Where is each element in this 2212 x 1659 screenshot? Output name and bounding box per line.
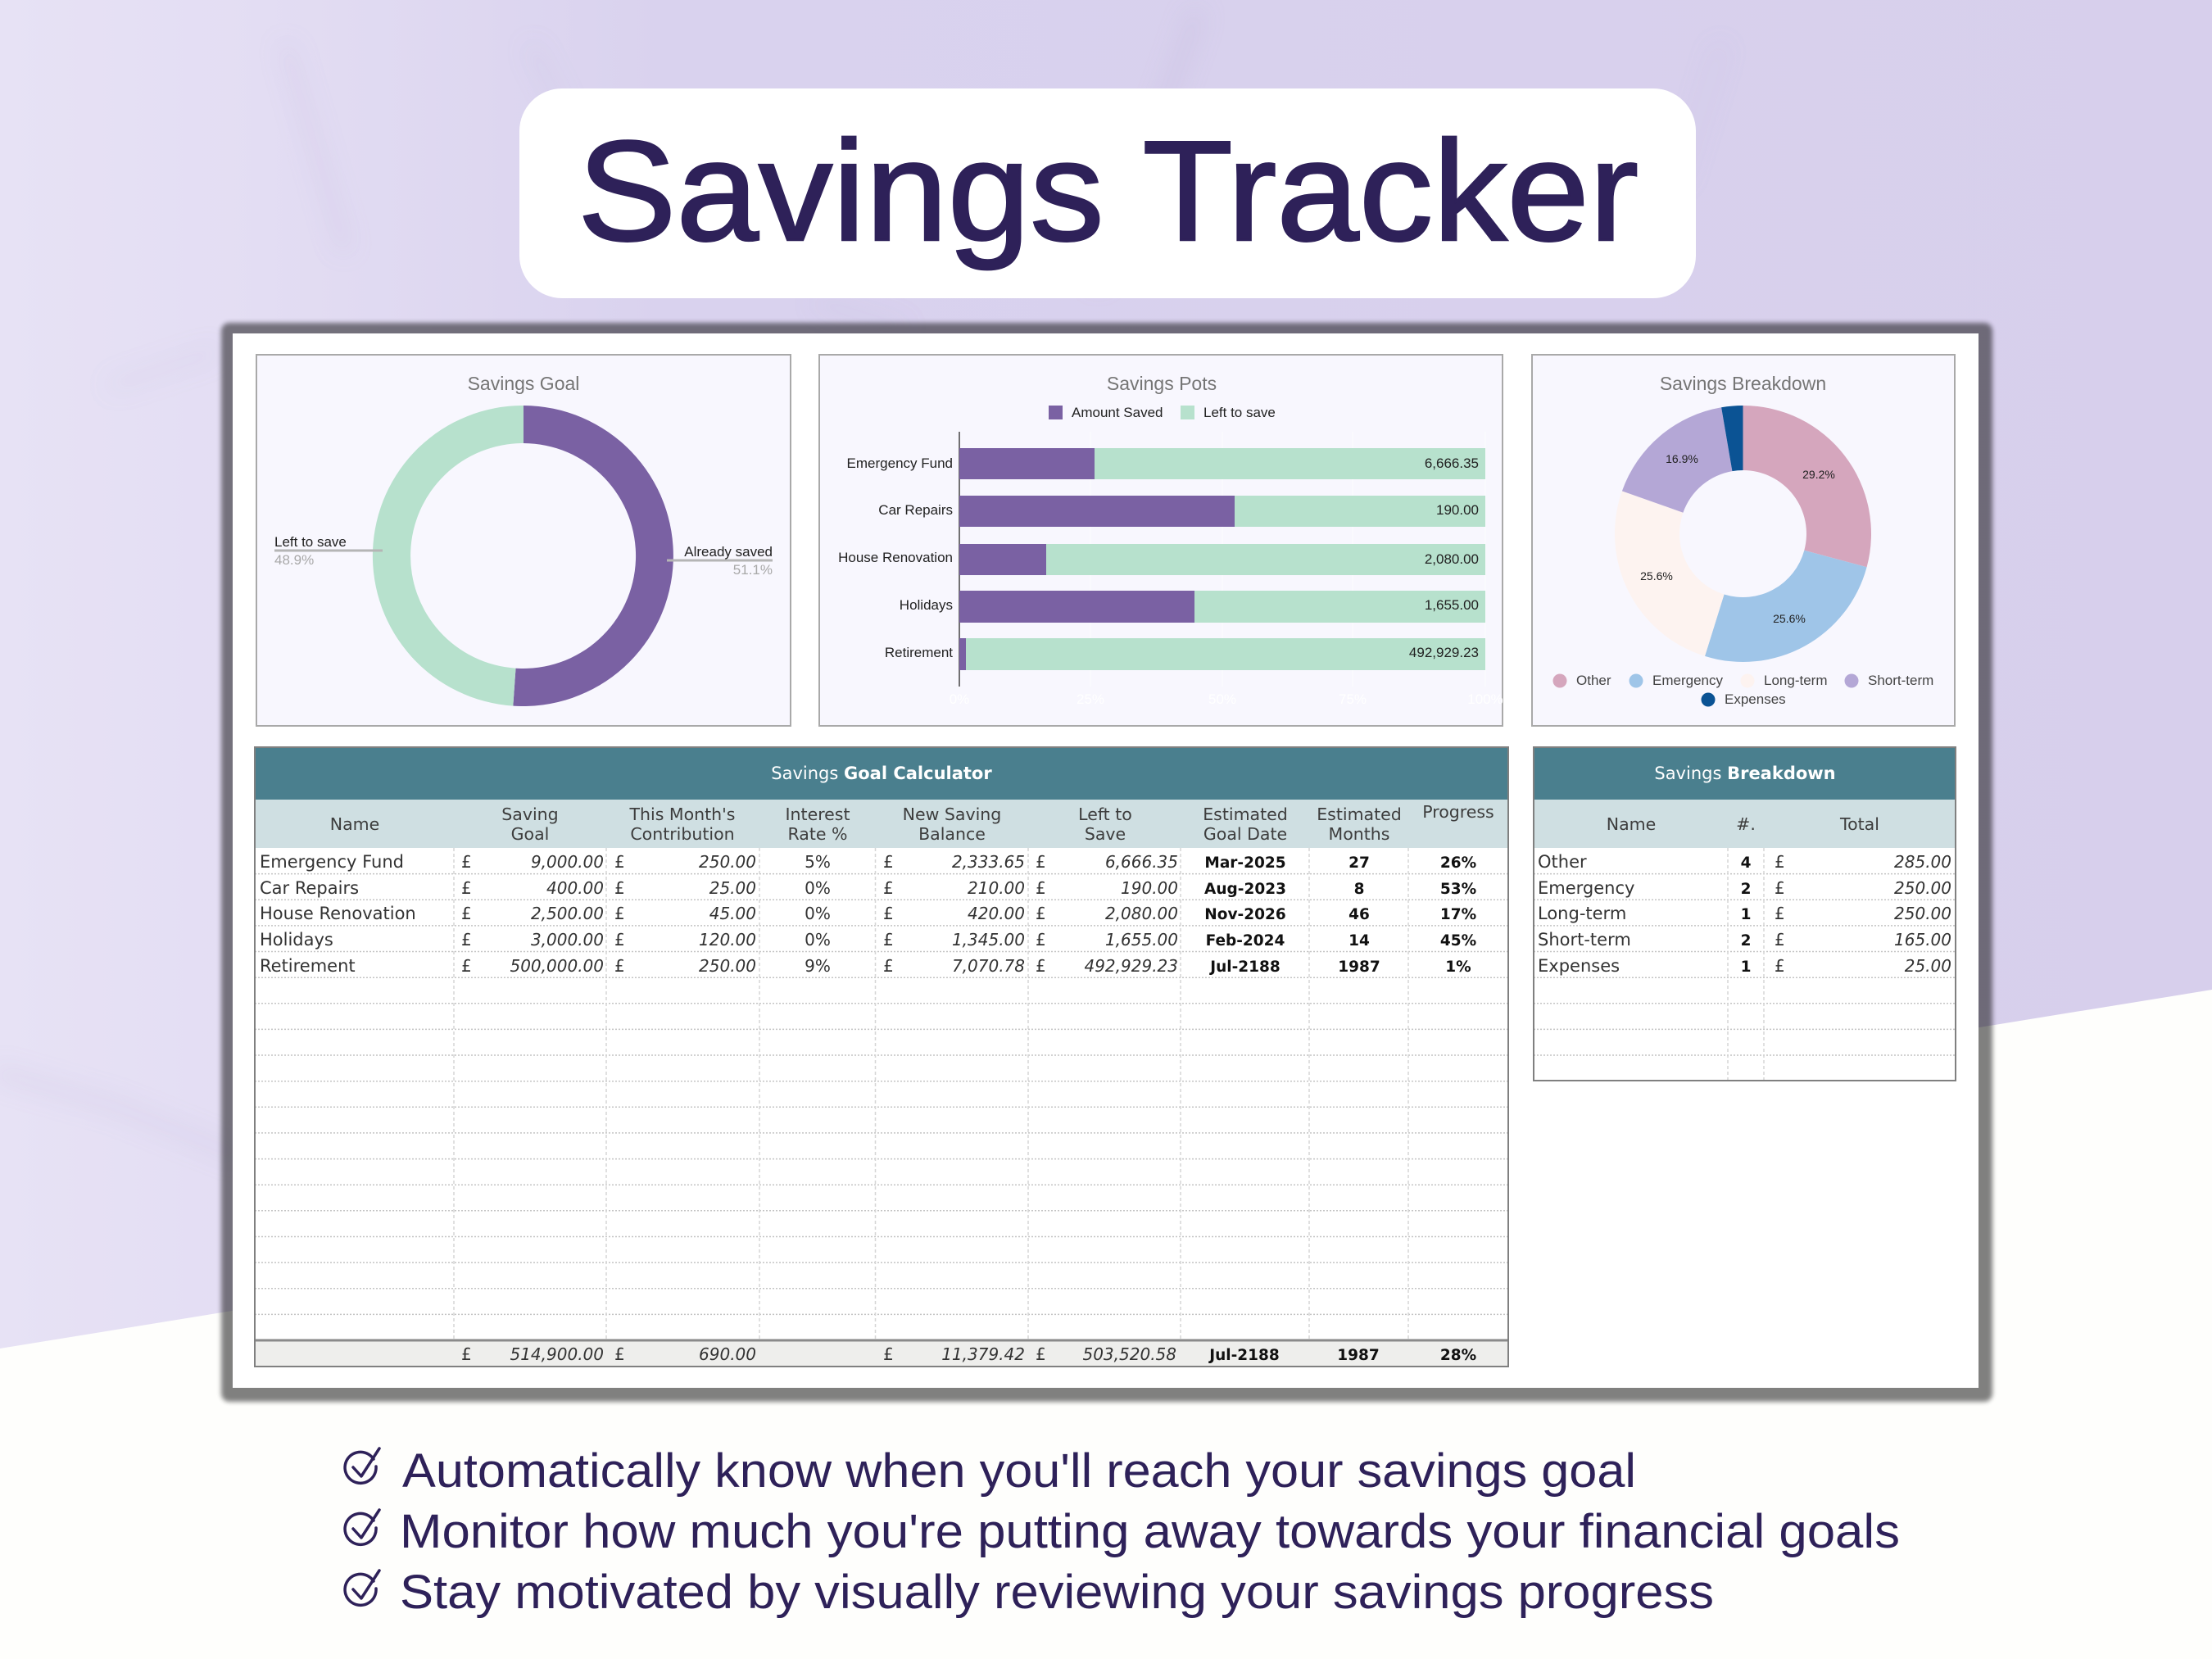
row: Holidays: 0% xyxy=(805,930,831,950)
totals row: 690.00 xyxy=(699,1344,756,1364)
row: Other: Other xyxy=(1538,852,1587,872)
bar: Car Repairs: 190.00 xyxy=(1436,502,1479,518)
row: Retirement xyxy=(260,956,1471,976)
row: Long-term: 1 xyxy=(1741,906,1751,923)
column headers: Saving xyxy=(501,805,559,824)
row: Car Repairs: 210.00 xyxy=(968,878,1025,898)
x axis labels: 50% xyxy=(1208,691,1236,707)
legend xyxy=(1049,405,1276,420)
row: Holidays: Holidays xyxy=(260,930,333,950)
bullet 2: Monitor how much you're putting away towards your financial goals xyxy=(400,1505,1900,1558)
row: House Renovation: £ xyxy=(461,904,472,923)
table title bar: Savings Breakdown xyxy=(1654,764,1836,783)
bar: Emergency Fund: 6,666.35 xyxy=(1425,456,1479,471)
donut slice: already saved xyxy=(513,406,673,706)
row: House Renovation: 46 xyxy=(1349,906,1370,923)
row: Expenses: £ xyxy=(1775,956,1785,976)
column headers xyxy=(1534,800,1956,848)
column headers: Progress xyxy=(1422,802,1494,822)
totals row: £ xyxy=(614,1344,625,1364)
bullet 1: Automatically know when you'll reach your savings goal xyxy=(402,1444,1636,1498)
bar: Retirement xyxy=(885,638,1485,670)
row: Other: £ xyxy=(1775,852,1785,872)
icon: check circle xyxy=(345,1448,379,1483)
gridlines and axis xyxy=(959,432,1485,687)
column headers: Total xyxy=(1839,814,1879,834)
column headers xyxy=(255,800,1508,848)
table outline xyxy=(1534,747,1956,1081)
callout: left to save: 48.9% xyxy=(274,552,314,568)
bar: Car Repairs xyxy=(878,496,1485,527)
totals row: £ xyxy=(883,1344,894,1364)
slice: Expenses xyxy=(1721,406,1743,471)
row: Emergency Fund: £ xyxy=(461,852,472,872)
row: Short-term: £ xyxy=(1775,930,1785,950)
totals row: 28% xyxy=(1440,1347,1476,1364)
row: Retirement: 492,929.23 xyxy=(1084,956,1178,976)
row: Car Repairs: 0% xyxy=(805,878,831,898)
totals row: £ xyxy=(461,1344,472,1364)
row: Holidays: £ xyxy=(1036,930,1046,950)
bar: Emergency Fund xyxy=(847,448,1485,479)
row: Car Repairs xyxy=(260,878,1476,898)
callout: already saved xyxy=(667,544,773,578)
row: House Renovation: House Renovation xyxy=(260,904,416,923)
row: Other xyxy=(1538,852,1951,872)
row: Car Repairs: £ xyxy=(461,878,472,898)
callout: left to save xyxy=(274,534,383,568)
donut slice: left to save xyxy=(373,406,524,706)
percent labels xyxy=(1640,452,1835,625)
row: Expenses: Expenses xyxy=(1538,956,1620,976)
column headers: Name xyxy=(330,814,379,834)
row: Car Repairs: 25.00 xyxy=(709,878,756,898)
title card xyxy=(519,88,1696,298)
row: Car Repairs: £ xyxy=(883,878,894,898)
chart title: Savings Pots: Savings Pots xyxy=(1107,373,1217,394)
row: House Renovation: £ xyxy=(883,904,894,923)
bar: House Renovation xyxy=(838,544,1485,575)
row: Retirement: Retirement xyxy=(260,956,356,976)
column headers: Name xyxy=(1607,814,1656,834)
bar: Holidays: Holidays xyxy=(900,597,953,613)
column headers: Balance xyxy=(918,824,986,844)
row: Short-term: 165.00 xyxy=(1894,930,1951,950)
table: savings breakdown xyxy=(1534,747,1956,1081)
percent labels: 29.2% xyxy=(1802,468,1835,481)
row: Emergency Fund: 6,666.35 xyxy=(1105,852,1178,872)
chart title: Savings Breakdown: Savings Breakdown xyxy=(1660,373,1826,394)
row: House Renovation: Nov-2026 xyxy=(1204,906,1286,923)
row: Long-term: Long-term xyxy=(1538,904,1626,923)
row: Short-term: 2 xyxy=(1741,932,1751,950)
column headers: Estimated xyxy=(1317,805,1402,824)
row: Short-term: Short-term xyxy=(1538,930,1631,950)
row: Emergency Fund: 5% xyxy=(805,852,831,872)
row: Car Repairs: 400.00 xyxy=(546,878,604,898)
title card: Savings Tracker xyxy=(578,111,1639,270)
column headers: Rate % xyxy=(787,824,848,844)
column headers: Months xyxy=(1329,824,1389,844)
row: Long-term xyxy=(1538,904,1951,923)
row: Car Repairs: £ xyxy=(614,878,625,898)
row: Holidays xyxy=(260,930,1476,950)
totals row: 1987 xyxy=(1337,1347,1380,1364)
row: Car Repairs: 53% xyxy=(1440,881,1476,898)
row: Emergency Fund: £ xyxy=(614,852,625,872)
bar: Retirement: Retirement xyxy=(885,645,953,660)
row: Long-term: 250.00 xyxy=(1894,904,1951,923)
row: House Renovation xyxy=(260,904,1476,923)
column headers: Left to xyxy=(1078,805,1132,824)
row: Emergency Fund: 26% xyxy=(1440,854,1476,872)
bar: Retirement: 492,929.23 xyxy=(1409,645,1479,660)
row: Holidays: 14 xyxy=(1349,932,1370,950)
column headers: Interest xyxy=(785,805,850,824)
bar: Holidays xyxy=(900,591,1485,623)
totals row: 11,379.42 xyxy=(941,1344,1025,1364)
row: Retirement: £ xyxy=(614,956,625,976)
row: Retirement: 1987 xyxy=(1338,959,1380,976)
x axis labels xyxy=(950,691,1503,707)
totals row: £ xyxy=(1036,1344,1046,1364)
row: Emergency: £ xyxy=(1775,878,1785,898)
panel: savings breakdown donut chart xyxy=(1532,355,1955,726)
x axis labels: 75% xyxy=(1339,691,1367,707)
legend: Long-term xyxy=(1764,673,1827,688)
x axis labels: 0% xyxy=(950,691,969,707)
column headers: Estimated xyxy=(1203,805,1288,824)
row: Retirement: £ xyxy=(1036,956,1046,976)
icon: check circle xyxy=(345,1510,379,1544)
row: Emergency Fund: £ xyxy=(883,852,894,872)
row: Car Repairs: 8 xyxy=(1354,881,1364,898)
row: Retirement: £ xyxy=(461,956,472,976)
row: Holidays: 45% xyxy=(1440,932,1476,950)
row: Holidays: Feb-2024 xyxy=(1206,932,1285,950)
row: Holidays: £ xyxy=(461,930,472,950)
grid lines xyxy=(255,848,1508,1340)
row: Retirement: 1% xyxy=(1445,959,1471,976)
panel: savings goal donut chart xyxy=(256,355,791,726)
panel: savings pots stacked bar chart xyxy=(819,355,1503,726)
callout: left to save: Left to save xyxy=(274,534,347,550)
row: Other: 4 xyxy=(1741,854,1752,872)
column headers: Goal xyxy=(511,824,549,844)
bar: House Renovation: House Renovation xyxy=(838,550,953,565)
row: Car Repairs: Car Repairs xyxy=(260,878,359,898)
slice: Short-term 16.9% xyxy=(1622,407,1732,513)
row: Emergency Fund: Mar-2025 xyxy=(1204,854,1286,872)
x axis labels: 25% xyxy=(1077,691,1104,707)
column headers: Goal Date xyxy=(1203,824,1287,844)
row: House Renovation: 0% xyxy=(805,904,831,923)
table outline xyxy=(255,747,1508,1367)
totals row xyxy=(255,1340,1508,1367)
row: Retirement: 7,070.78 xyxy=(952,956,1025,976)
row: House Renovation: 420.00 xyxy=(968,904,1025,923)
percent labels: 16.9% xyxy=(1666,452,1698,465)
row: Expenses: 25.00 xyxy=(1905,956,1951,976)
bar: Emergency Fund: Emergency Fund xyxy=(847,456,953,471)
row: Short-term xyxy=(1538,930,1951,950)
row: Emergency: 250.00 xyxy=(1894,878,1951,898)
row: Emergency Fund: 250.00 xyxy=(699,852,756,872)
row: Emergency xyxy=(1538,878,1951,898)
column headers: Save xyxy=(1085,824,1126,844)
row: House Renovation: 17% xyxy=(1440,906,1476,923)
row: Holidays: £ xyxy=(614,930,625,950)
icon: check circle xyxy=(345,1571,379,1605)
row: Retirement: 9% xyxy=(805,956,831,976)
callout: already saved: 51.1% xyxy=(733,562,773,578)
row: House Renovation: £ xyxy=(614,904,625,923)
table: savings goal calculator xyxy=(255,747,1508,1367)
row: Other: 285.00 xyxy=(1894,852,1951,872)
row: Holidays: 3,000.00 xyxy=(531,930,604,950)
row: Emergency Fund: £ xyxy=(1036,852,1046,872)
bullet 3: Stay motivated by visually reviewing your savings progress xyxy=(400,1566,1714,1619)
x axis labels: 100% xyxy=(1467,691,1503,707)
row: Long-term: £ xyxy=(1775,904,1785,923)
row: Retirement: 500,000.00 xyxy=(510,956,604,976)
row: Retirement: 250.00 xyxy=(699,956,756,976)
callout: already saved: Already saved xyxy=(684,544,773,560)
percent labels: 25.6% xyxy=(1773,612,1806,625)
row: House Renovation: 2,080.00 xyxy=(1105,904,1178,923)
chart title: Savings Goal: Savings Goal xyxy=(468,373,579,394)
totals row: 514,900.00 xyxy=(510,1344,604,1364)
column headers: New Saving xyxy=(903,805,1001,824)
row: Emergency Fund: Emergency Fund xyxy=(260,852,404,872)
row: House Renovation: £ xyxy=(1036,904,1046,923)
legend: Other xyxy=(1576,673,1611,688)
row: Car Repairs: Aug-2023 xyxy=(1204,881,1286,898)
legend xyxy=(1553,673,1933,707)
row: House Renovation: 45.00 xyxy=(709,904,756,923)
slice: Emergency 25.6% xyxy=(1705,551,1867,662)
legend: Amount Saved xyxy=(1072,405,1163,420)
totals row: 503,520.58 xyxy=(1082,1344,1176,1364)
row: Car Repairs: £ xyxy=(1036,878,1046,898)
bar: Holidays: 1,655.00 xyxy=(1425,597,1479,613)
slice: Long-term 25.6% xyxy=(1615,491,1724,656)
percent labels: 25.6% xyxy=(1640,569,1673,582)
row: Holidays: 1,345.00 xyxy=(952,930,1025,950)
legend: Short-term xyxy=(1868,673,1933,688)
column headers: #. xyxy=(1736,814,1756,834)
row: Car Repairs: 190.00 xyxy=(1121,878,1178,898)
row: Expenses: 1 xyxy=(1741,959,1751,976)
row: Holidays: 120.00 xyxy=(699,930,756,950)
grid lines xyxy=(1534,848,1956,1081)
row: Emergency Fund xyxy=(260,852,1476,872)
row: Expenses xyxy=(1538,956,1951,976)
legend: Left to save xyxy=(1203,405,1276,420)
row: Emergency: 2 xyxy=(1741,881,1751,898)
slice: Other 29.2% xyxy=(1743,406,1871,567)
row: Emergency Fund: 9,000.00 xyxy=(531,852,604,872)
totals row: Jul-2188 xyxy=(1208,1347,1280,1364)
row: Holidays: £ xyxy=(883,930,894,950)
table title bar xyxy=(1534,747,1956,800)
bar: Car Repairs: Car Repairs xyxy=(878,502,953,518)
table title bar: Savings Goal Calculator xyxy=(771,764,992,783)
row: Emergency Fund: 2,333.65 xyxy=(952,852,1025,872)
row: House Renovation: 2,500.00 xyxy=(531,904,604,923)
benefits list xyxy=(345,1444,1900,1619)
spreadsheet sheet with shadow xyxy=(221,323,1992,1402)
row: Retirement: Jul-2188 xyxy=(1208,959,1281,976)
row: Retirement: £ xyxy=(883,956,894,976)
column headers: This Month's xyxy=(629,805,735,824)
legend: Expenses xyxy=(1725,691,1786,707)
row: Holidays: 1,655.00 xyxy=(1105,930,1178,950)
row: Emergency: Emergency xyxy=(1538,878,1634,898)
column headers: Contribution xyxy=(630,824,735,844)
row: Emergency Fund: 27 xyxy=(1349,854,1370,872)
bar: House Renovation: 2,080.00 xyxy=(1425,551,1479,567)
table title bar xyxy=(255,747,1508,800)
legend: Emergency xyxy=(1652,673,1723,688)
